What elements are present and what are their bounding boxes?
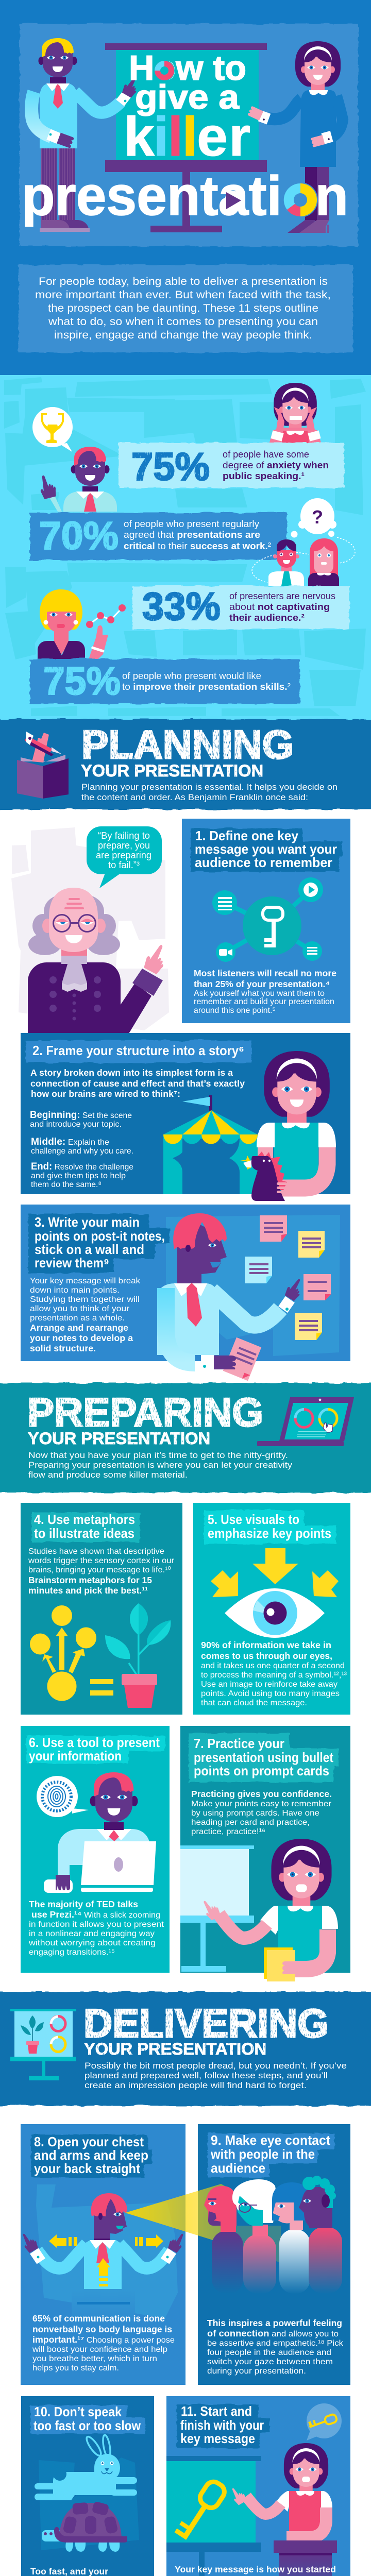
text — [194, 968, 336, 1015]
stat box 1 — [119, 443, 344, 489]
band: preparing heading: PREPARING — [27, 1389, 263, 1435]
text: in function it allows you to present — [29, 1920, 164, 1929]
text: to process the meaning of a symbol.¹²,¹³ — [201, 1671, 347, 1680]
text: remember and build your presentation — [194, 997, 334, 1006]
text: Beginning: Set the scene — [30, 1110, 132, 1121]
text: nonverbally so body language is — [32, 2324, 172, 2334]
text: planning intro: the content and order. As Benjamin Franklin once said: — [81, 792, 308, 802]
heading: points on post-it notes, — [35, 1228, 165, 1244]
note pink 2 — [303, 1274, 331, 1300]
note yellow 2 — [295, 1313, 322, 1340]
card 6: use a tool: your information — [29, 1748, 122, 1764]
illustration: thought bubble with key — [307, 2403, 342, 2441]
card 10: speed — [21, 2396, 154, 2576]
text: intro paragraph: For people today, being able to deliver a presentation is — [39, 275, 328, 287]
text: of connection and allows you to — [207, 2328, 339, 2338]
text: This inspires a powerful feeling — [207, 2318, 342, 2328]
text — [201, 1640, 347, 1707]
text: and introduce your topic. — [30, 1120, 122, 1129]
stat box 1: degree of anxiety when — [223, 460, 329, 470]
text: intro paragraph: what to do, so when it comes to presenting you can — [48, 315, 318, 328]
text: will boost your confidence and help — [32, 2345, 167, 2354]
illustration: presenter man — [31, 38, 143, 232]
text: delivering intro: planned and prepared well, follow these steps, and you’ll — [85, 2071, 328, 2080]
card 7: practice: 7. Practice your — [194, 1736, 284, 1751]
sticky notes wall — [166, 1215, 340, 1356]
text: helps you to stay calm. — [32, 2364, 119, 2372]
text: delivering intro: Possibly the bit most people dread, but you needn’t. If you’ve — [85, 2061, 347, 2071]
card 11: start and finish: finish with your — [180, 2417, 264, 2433]
text: planning intro — [81, 782, 338, 802]
text: by using prompt cards. Have one — [191, 1809, 319, 1818]
projector screen — [105, 43, 267, 232]
heading: message you want your — [195, 841, 337, 857]
card 10: speed: too fast or too slow — [33, 2418, 141, 2433]
text: allow you to think of your — [30, 1304, 130, 1313]
illustration: rabbit — [35, 2434, 137, 2500]
illustration: screen with key — [166, 2456, 261, 2576]
text — [28, 1899, 164, 1957]
text: Ask yourself what you want them to — [194, 989, 325, 998]
stat box 2: agreed that presentations are — [124, 529, 260, 540]
heading — [191, 828, 342, 872]
card 11: start and finish: 11. Start and — [181, 2403, 252, 2419]
text: 65% of communication is done — [32, 2313, 165, 2324]
title: presentation — [22, 164, 348, 227]
illustration: presenter woman — [247, 41, 343, 233]
text: intro paragraph: more important than ever. But when faced with the task, — [35, 289, 331, 301]
stat box 3: of presenters are nervous — [229, 590, 335, 601]
note yellow — [298, 1231, 325, 1258]
card 9: eye contact: audience — [211, 2160, 265, 2176]
band: delivering heading: DELIVERING — [83, 2001, 329, 2046]
text: preparing intro: flow and produce some killer material. — [28, 1470, 188, 1480]
stat box 4: of people who present would like — [122, 670, 261, 681]
stat box 2 — [30, 513, 286, 560]
icon: large eye — [225, 1588, 325, 1638]
text: Your key message will break — [30, 1277, 141, 1285]
title — [22, 48, 348, 227]
text: during your presentation. — [207, 2367, 306, 2376]
speech bubble quote: to fail.”³ — [108, 860, 140, 870]
title: r — [229, 105, 250, 167]
illustration: man with laptop — [37, 1772, 156, 1893]
card 4: metaphors: 4. Use metaphors — [34, 1512, 135, 1527]
speech bubble quote — [87, 826, 162, 888]
card 5: visuals: 5. Use visuals to — [208, 1512, 299, 1527]
stat box 2: critical to their success at work.² — [124, 540, 271, 551]
illustration: woman with graph — [38, 589, 126, 661]
text: planning intro: Planning your presentation is essential. It helps you decide on — [81, 782, 338, 792]
icon: arrows showing posture — [49, 2234, 163, 2286]
hero section — [0, 0, 371, 375]
stat box 2: of people who present regularly — [124, 518, 260, 529]
icon: presentation screen with plant and charts — [10, 2009, 76, 2080]
card 4: metaphors — [21, 1503, 182, 1715]
illustration: thought bubble and couple: ? — [312, 506, 323, 528]
text — [30, 1067, 245, 1189]
card 8: open chest — [19, 2124, 187, 2385]
heading — [28, 1214, 170, 1273]
text: delivering intro: create an impression people will find hard to forget. — [85, 2080, 307, 2090]
text: Brainstorm metaphors for 15 — [28, 1575, 152, 1585]
text: Practicing gives you confidence. — [191, 1789, 332, 1799]
illustration: confident man — [19, 2193, 187, 2328]
text: intro paragraph: the prospect can be daunting. These 11 steps outline — [48, 302, 318, 314]
text: in a nonlinear and engaging way — [29, 1929, 155, 1938]
text: Make your points easy to remember — [191, 1800, 332, 1808]
text: The majority of TED talks — [29, 1899, 138, 1909]
card 9: eye contact: 9. Make eye contact — [211, 2132, 330, 2148]
card 5: visuals — [193, 1503, 350, 1715]
band: planning heading: YOUR PRESENTATION — [81, 761, 263, 780]
card 7: practice: points on prompt cards — [194, 1763, 329, 1778]
title: k — [124, 105, 155, 167]
text: heading per card and practice, — [191, 1818, 310, 1827]
text — [30, 1277, 141, 1353]
text: engaging transitions.¹⁵ — [29, 1948, 115, 1957]
illustration: thought bubble and couple — [252, 498, 355, 586]
card 2: frame structure into a story — [21, 1033, 350, 1201]
band: delivering heading — [0, 1992, 371, 2106]
text: Studying them together will — [30, 1295, 140, 1304]
speech bubble quote: “By failing to — [98, 831, 150, 841]
text: that can cloud the message. — [201, 1699, 307, 1707]
icon: fingerprint logo — [42, 1782, 71, 1811]
text: intro paragraph — [35, 275, 331, 341]
text: minutes and pick the best.¹¹ — [28, 1585, 148, 1596]
stat box 1: 75% — [131, 445, 210, 489]
illustration: audience of four people — [204, 2176, 342, 2294]
text: your notes to develop a — [30, 1333, 133, 1343]
stat box 4: 75% — [43, 659, 121, 703]
text: comes to us through our eyes, — [201, 1651, 332, 1661]
text: important.¹⁷ Choosing a power pose — [32, 2334, 175, 2345]
text: presentation as a whole. — [30, 1314, 125, 1323]
speech bubble quote: are preparing — [96, 850, 151, 860]
illustration: anxious woman — [269, 383, 322, 444]
illustration: woman with dinosaur puppet — [240, 1051, 336, 1201]
card 6: use a tool: 6. Use a tool to present — [29, 1735, 160, 1750]
text: practice, practice!¹⁶ — [191, 1827, 265, 1836]
card 1: define key message — [182, 819, 350, 1023]
card 5: visuals: emphasize key points — [208, 1526, 331, 1541]
card 9: eye contact — [125, 2124, 350, 2385]
illustration: potted plant — [105, 1603, 171, 1708]
text: and it takes us one quarter of a second — [201, 1662, 345, 1670]
text: preparing intro: Now that you have your plan it’s time to get to the nitty-gritty. — [28, 1450, 288, 1460]
card 9: eye contact: with people in the — [210, 2146, 315, 2162]
text: preparing intro — [28, 1450, 293, 1480]
text: Use an image to reinforce take away — [201, 1680, 338, 1689]
text: points. Avoid using too many images — [201, 1689, 340, 1698]
stat box 2: 70% — [39, 514, 119, 558]
icon: play triangle in a — [225, 191, 241, 211]
diagram: key network — [212, 877, 323, 962]
text: End: Resolve the challenge — [31, 1161, 133, 1172]
text — [28, 1547, 175, 1596]
speech bubble quote: prepare, you — [98, 840, 150, 851]
text: and give them tips to help — [31, 1172, 126, 1180]
text — [32, 2313, 175, 2372]
icon: arrows pointing to eye — [211, 1548, 339, 1597]
text: connection of cause and effect and that’s exactly — [30, 1078, 245, 1089]
stat box 3 — [132, 585, 349, 629]
text: preparing intro: Preparing your presentation is where you can let your creativity — [28, 1460, 293, 1470]
text: Your key message is how you started — [175, 2564, 336, 2574]
illustration: woman with prompt cards — [199, 1839, 338, 1981]
band: planning heading: PLANNING — [81, 722, 294, 767]
note pink — [260, 1215, 287, 1242]
illustration: man sticking notes — [157, 1213, 307, 1381]
card 6: use a tool — [21, 1726, 170, 1973]
text: brains, bringing your message to life.¹⁰ — [28, 1566, 171, 1574]
text: intro paragraph: inspire, engage and change the way people think. — [54, 329, 312, 341]
icon: donut letter o in How — [154, 60, 175, 81]
text: Middle: Explain the — [31, 1137, 109, 1147]
heading: 1. Define one key — [195, 828, 299, 843]
text: around this one point.⁵ — [194, 1006, 276, 1015]
title: give a — [135, 78, 240, 116]
text: Arrange and rearrange — [30, 1323, 128, 1333]
text: challenge and why you care. — [31, 1147, 133, 1156]
stat box 1: of people have some — [223, 449, 309, 460]
band: delivering heading: YOUR PRESENTATION — [84, 2040, 266, 2058]
illustration: presentation stand — [180, 1845, 254, 1972]
icon: trophy — [41, 413, 64, 443]
card 7: practice — [180, 1726, 350, 1981]
card 10: speed: 10. Don’t speak — [34, 2404, 122, 2419]
text: down into main points. — [30, 1286, 120, 1295]
card 7: practice: presentation using bullet — [194, 1750, 333, 1765]
stat box 4: to improve their presentation skills. ² — [122, 681, 291, 692]
band: preparing heading — [0, 1383, 371, 1493]
icon: book and pen — [17, 732, 69, 799]
card 8: open chest: your back straight — [34, 2161, 140, 2176]
text: than 25% of your presentation.⁴ — [194, 979, 330, 989]
text: Most listeners will recall no more — [194, 968, 336, 978]
text: four people in the audience and — [207, 2348, 331, 2357]
text: solid structure. — [30, 1343, 96, 1353]
diagram: idea arrows — [30, 1605, 113, 1701]
text: how our brains are wired to think⁷: — [31, 1089, 180, 1099]
illustration: man with trophy bubble — [32, 407, 117, 512]
text — [191, 1789, 332, 1836]
text: use Prezi.¹⁴ With a slick zooming — [31, 1909, 160, 1920]
stats section — [0, 375, 371, 720]
title: How to — [129, 48, 246, 88]
illustration: tortoise — [42, 2501, 127, 2552]
band: planning heading — [0, 719, 371, 809]
stat box 3: their audience.² — [229, 612, 305, 623]
graphic: eye contact beam — [125, 2184, 281, 2263]
title: l — [168, 105, 183, 167]
text: switch your gaze between them — [207, 2358, 333, 2366]
illustration: Benjamin Franklin with quote — [11, 826, 172, 1033]
text: Studies have shown that descriptive — [28, 1547, 164, 1556]
band: preparing heading: YOUR PRESENTATION — [28, 1429, 210, 1448]
heading: review them⁹ — [35, 1255, 109, 1270]
stat box 3: about not captivating — [229, 601, 330, 612]
text: without worrying about creating — [28, 1939, 156, 1947]
title: i — [154, 105, 169, 167]
stat box 3: 33% — [142, 585, 221, 629]
heading: 3. Write your main — [35, 1214, 140, 1230]
text: them do the same.⁸ — [31, 1180, 102, 1189]
card 8: open chest: and arms and keep — [34, 2147, 148, 2163]
text: words trigger the sensory cortex in our — [28, 1556, 175, 1565]
card 3: post-it notes — [21, 1205, 350, 1381]
card 4: metaphors: to illustrate ideas — [34, 1526, 134, 1541]
card 11: start and finish — [166, 2396, 350, 2576]
card 8: open chest: 8. Open your chest — [34, 2134, 144, 2149]
title: l — [182, 105, 198, 167]
text: you breathe better, which in turn — [32, 2354, 157, 2363]
text: be assertive and empathetic.¹⁸ Pick — [207, 2339, 344, 2348]
card 11: start and finish: key message — [180, 2431, 255, 2446]
text: A story broken down into its simplest form is a — [30, 1067, 233, 1078]
illustration: puppet tent — [163, 1095, 258, 1194]
icon: laptop with charts — [257, 1397, 354, 1446]
text — [207, 2318, 344, 2376]
heading: stick on a wall and — [35, 1242, 144, 1257]
text: 90% of information we take in — [201, 1640, 331, 1650]
stat box 1: public speaking.¹ — [223, 470, 305, 481]
text: delivering intro — [85, 2061, 347, 2090]
note light blue — [245, 1257, 272, 1283]
card 2: frame structure into a story: 2. Frame your structure into a story⁶ — [32, 1043, 244, 1058]
stat box 4 — [30, 659, 300, 704]
illustration: woman at podium — [229, 2443, 337, 2576]
heading: audience to remember — [195, 855, 332, 870]
title: e — [197, 105, 228, 167]
icon: donut letter o in presentation — [283, 182, 318, 217]
